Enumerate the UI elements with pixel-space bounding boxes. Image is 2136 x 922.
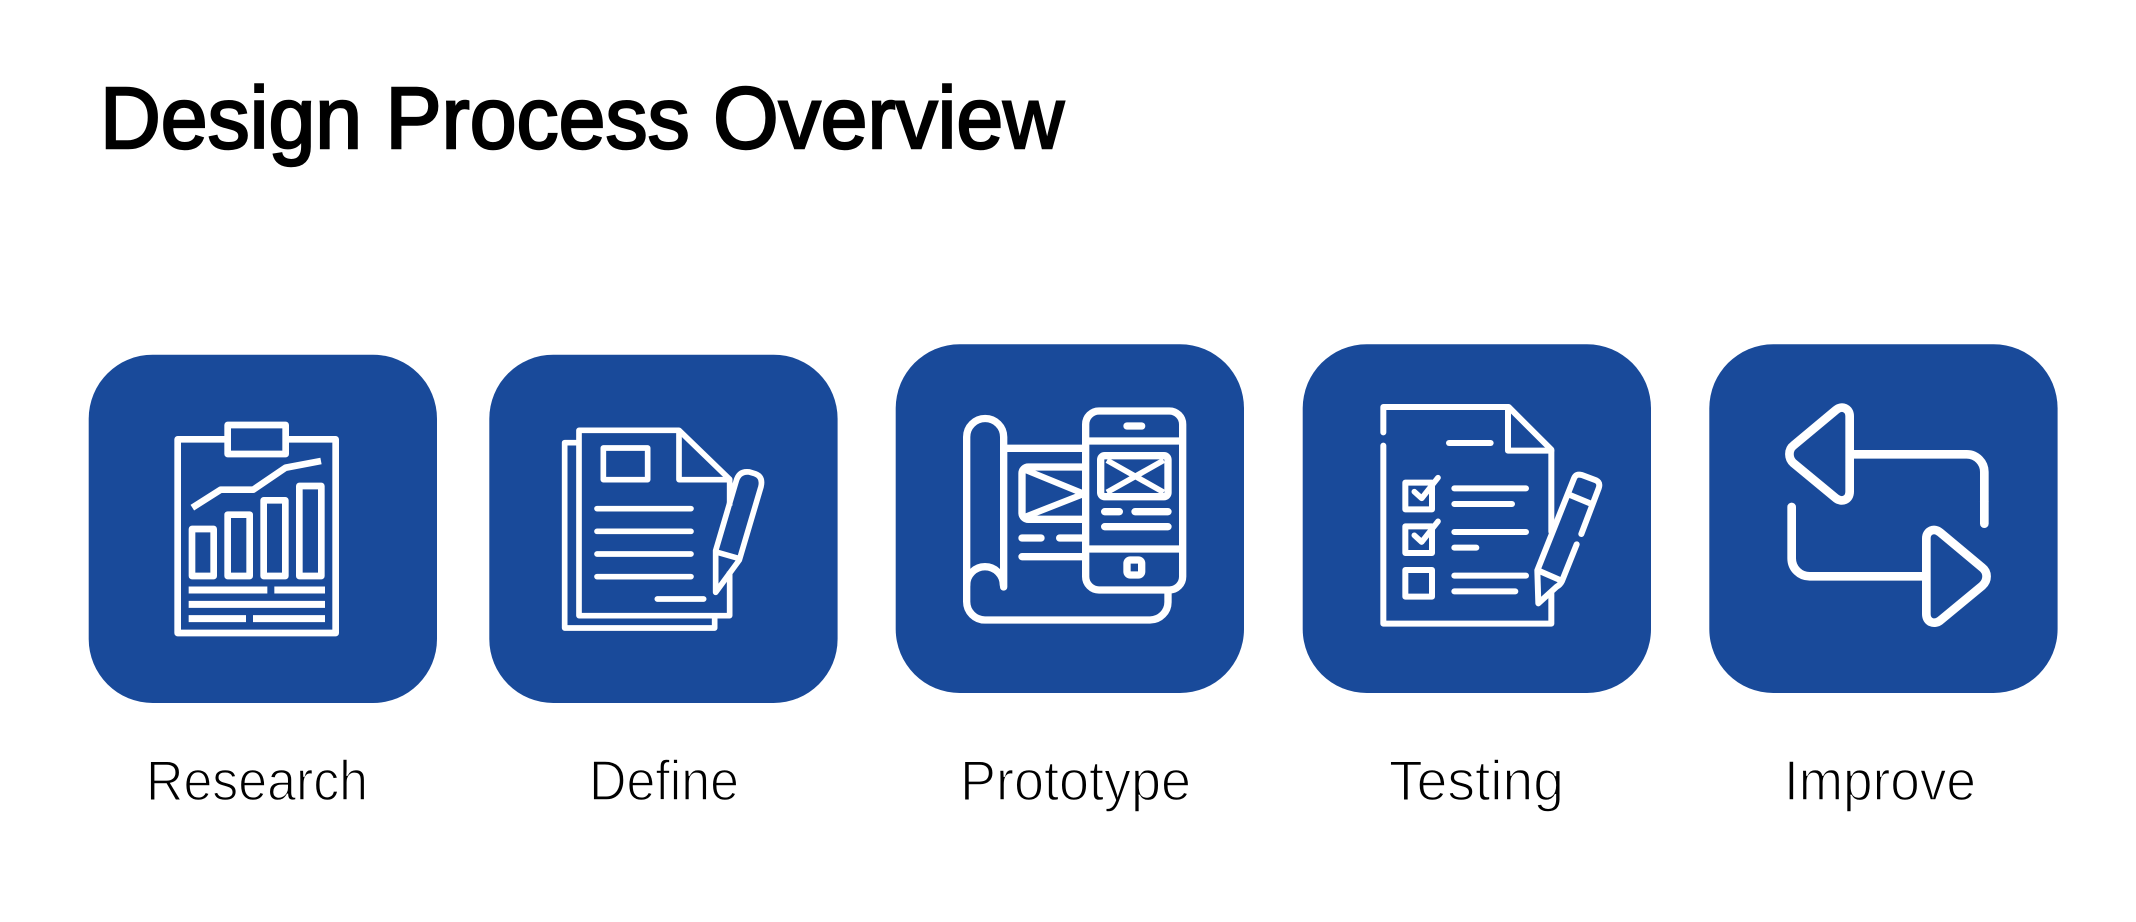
title: Design Process Overview xyxy=(100,70,1065,167)
label: Define: Define xyxy=(589,749,739,813)
panel: testing xyxy=(1303,344,1651,813)
research tile xyxy=(89,355,437,703)
label: Improve: Improve xyxy=(1784,749,1976,813)
label: Research: Research xyxy=(146,749,368,813)
panel: research xyxy=(89,355,437,813)
define tile xyxy=(489,355,838,703)
icon: blueprint and phone wireframe xyxy=(967,411,1183,620)
panel: prototype xyxy=(896,344,1244,813)
improve tile xyxy=(1709,344,2058,693)
icon: documents with pen xyxy=(565,430,762,628)
icon: loop arrows xyxy=(1789,408,1987,623)
icon: checklist with pencil xyxy=(1383,407,1599,624)
label: Testing: Testing xyxy=(1389,749,1564,813)
panel: define xyxy=(489,355,838,813)
prototype tile xyxy=(896,344,1244,693)
label: Prototype: Prototype xyxy=(960,749,1191,813)
icon: clipboard with chart xyxy=(178,425,336,633)
testing tile xyxy=(1303,344,1651,693)
panel: improve xyxy=(1709,344,2058,813)
